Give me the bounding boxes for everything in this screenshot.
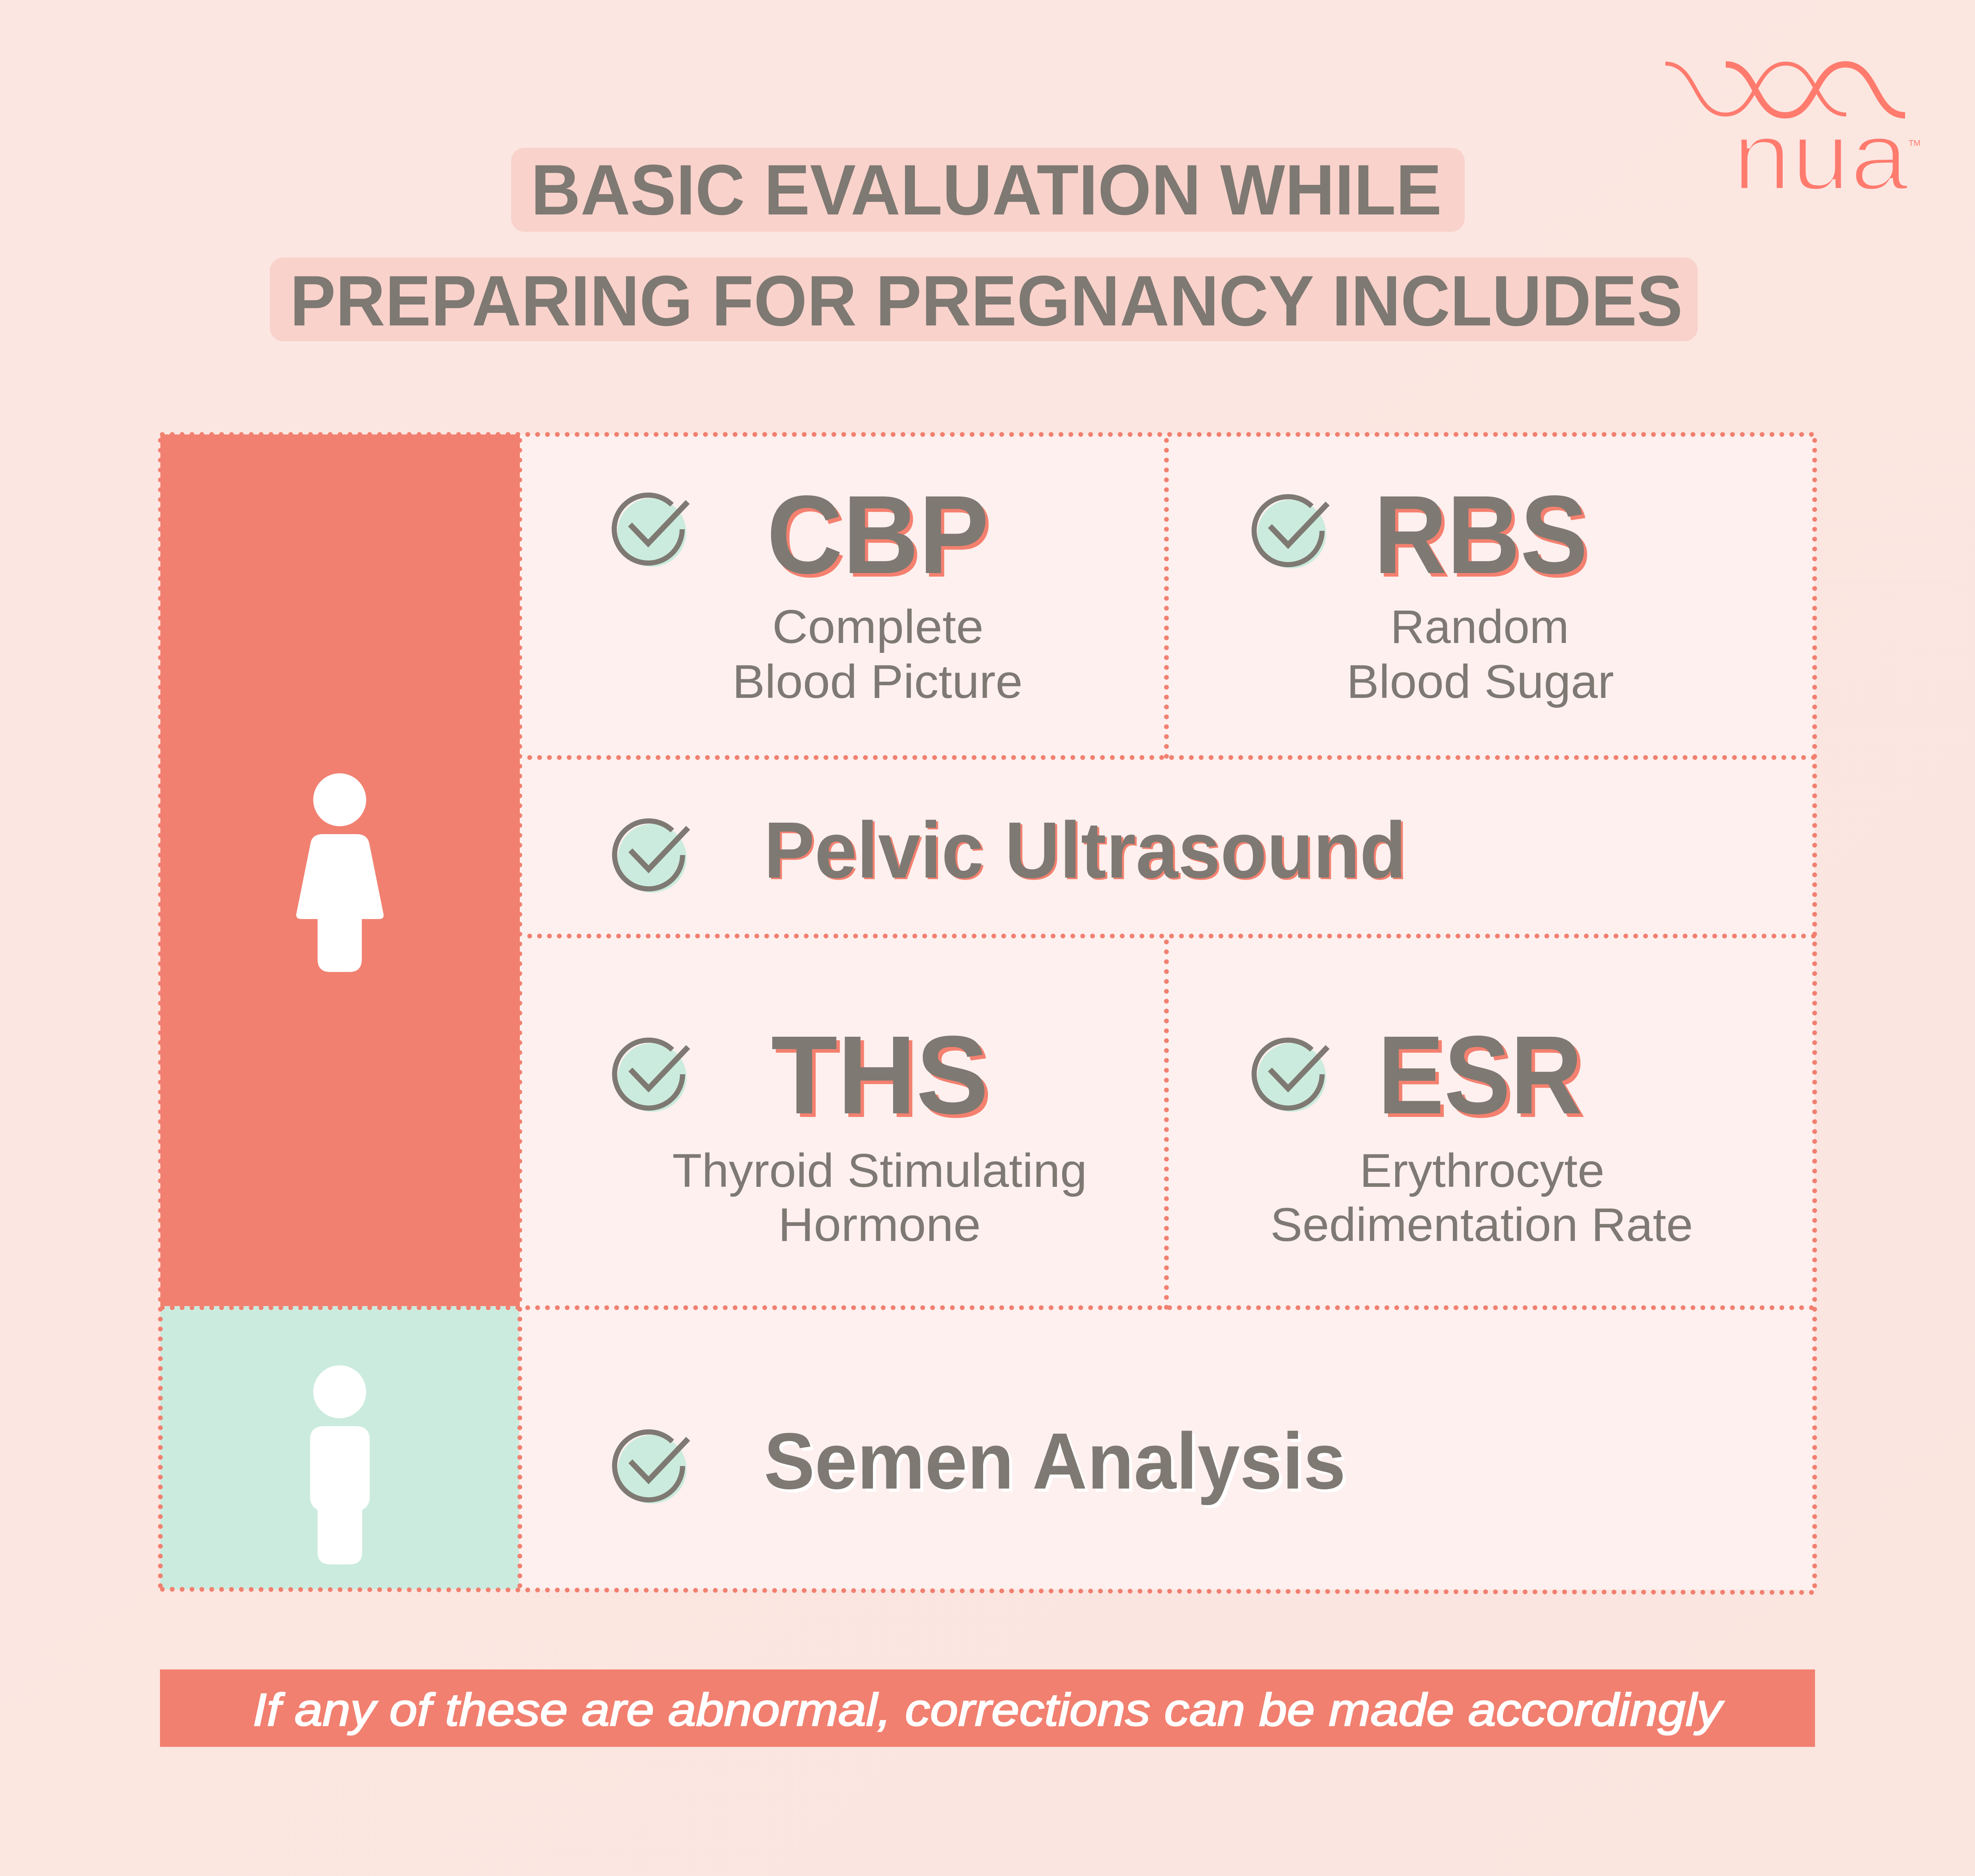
heading THS: THS: [771, 1013, 989, 1137]
description THS: [672, 1144, 1087, 1251]
heading RBS: RBS: [1377, 476, 1591, 600]
description ESR: Erythrocyte: [1360, 1144, 1604, 1197]
heading pelvic: Pelvic Ultrasound: [764, 805, 1406, 895]
title: BASIC EVALUATION WHILE: [531, 150, 1442, 230]
heading CBP: CBP: [770, 476, 992, 600]
heading ESR: ESR: [1378, 1013, 1582, 1137]
description RBS: [1347, 600, 1614, 708]
logo: nua: [1665, 64, 1920, 211]
description CBP: Complete: [772, 600, 984, 653]
heading semen: Semen Analysis: [764, 1416, 1346, 1506]
dotted grid lines: [160, 434, 1815, 1592]
heading ESR: ESR: [1381, 1016, 1586, 1141]
icon: check pelvic: [615, 821, 688, 893]
description ESR: [1270, 1144, 1693, 1251]
panel: female column: [160, 434, 520, 1306]
description CBP: Blood Picture: [732, 655, 1023, 708]
footer callout: [160, 1669, 1815, 1747]
panel: male column: [160, 1306, 519, 1589]
icon: male figure: [310, 1365, 370, 1564]
cell: Pelvic Ultrasound: [615, 805, 1408, 896]
cell: RBS: [1254, 472, 1614, 708]
footer callout: If any of these are abnormal, corrections can be made accordingly: [253, 1684, 1725, 1735]
icon: check ESR: [1254, 1040, 1328, 1112]
heading RBS: RBS: [1374, 472, 1588, 597]
description RBS: Random: [1390, 600, 1569, 653]
title: PREPARING FOR PREGNANCY INCLUDES: [290, 261, 1683, 341]
cell: ESR: [1254, 1013, 1693, 1251]
icon: check semen: [615, 1432, 688, 1504]
cell: THS: [615, 1013, 1087, 1251]
logo: nua: TM: [1909, 139, 1920, 148]
cell: Semen Analysis: [615, 1416, 1349, 1509]
heading CBP: CBP: [767, 472, 989, 597]
cell: CBP: [614, 472, 1023, 708]
description THS: Thyroid Stimulating: [672, 1144, 1087, 1197]
logo: nua: nua: [1732, 102, 1909, 211]
icon: check CBP: [614, 495, 688, 567]
description THS: Hormone: [778, 1198, 981, 1251]
icon: check THS: [615, 1040, 688, 1112]
description RBS: Blood Sugar: [1347, 655, 1614, 708]
description ESR: Sedimentation Rate: [1270, 1198, 1693, 1251]
heading pelvic: Pelvic Ultrasound: [766, 807, 1408, 896]
heading semen: Semen Analysis: [767, 1419, 1349, 1509]
heading THS: THS: [775, 1016, 992, 1141]
icon: female figure: [296, 773, 384, 972]
icon: check RBS: [1254, 497, 1328, 568]
description CBP: [732, 600, 1023, 708]
title: [270, 148, 1698, 341]
panel: test grid background: [520, 434, 1815, 1590]
